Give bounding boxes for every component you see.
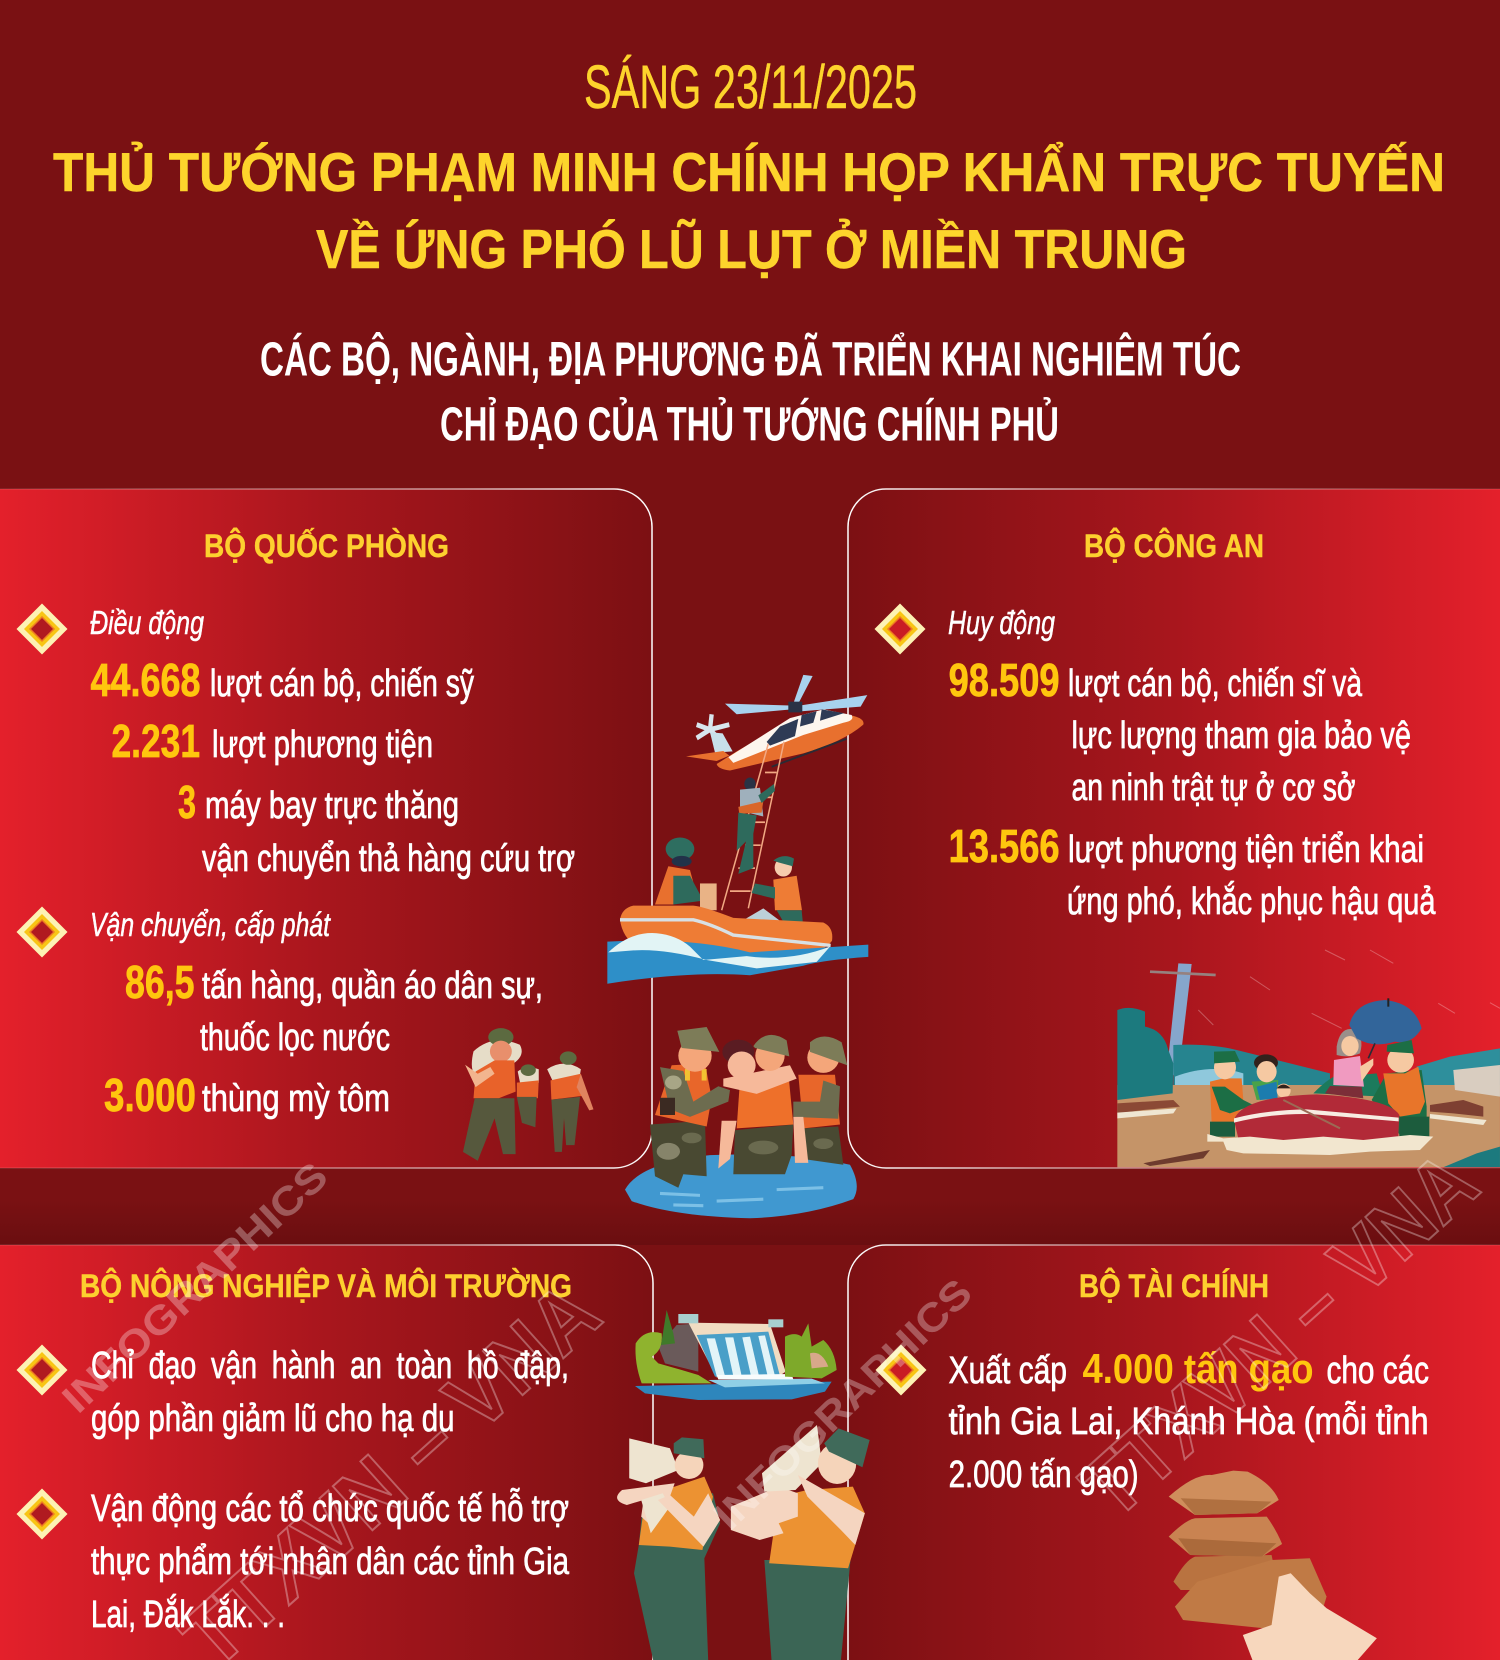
subtitle line 2: CHỈ ĐẠO CỦA THỦ TƯỚNG CHÍNH PHỦ bbox=[440, 396, 1059, 452]
text: international support: Vận động các tổ chức quốc tế hỗ trợ bbox=[91, 1487, 569, 1530]
water bbox=[607, 941, 868, 984]
label: Vận chuyển, cấp phát: Vận chuyển, cấp phát bbox=[90, 906, 331, 943]
text: dam operation bbox=[91, 1345, 569, 1440]
stat: 44.668: 44.668 bbox=[90, 654, 200, 706]
illustration: soldiers carrying sacks bbox=[463, 1028, 593, 1161]
panel: Bộ Quốc phòng bbox=[0, 489, 652, 1168]
illustration: soldier carrying sack right bbox=[731, 1425, 870, 1660]
soldier right bbox=[793, 1037, 847, 1165]
icon: diamond bullet bbox=[16, 1488, 68, 1540]
text: dam operation: Chỉ đạo vận hành an toàn hồ đập, bbox=[91, 1345, 569, 1387]
label: Điều động: Điều động bbox=[90, 604, 204, 641]
rescuer right bbox=[744, 856, 803, 927]
panel: Bộ Nông nghiệp và Môi trường bbox=[0, 1245, 653, 1660]
panel: Bộ Tài chính bbox=[848, 1245, 1500, 1660]
date line: SÁNG 23/11/2025 bbox=[584, 53, 917, 121]
stat: 44.668 bbox=[90, 654, 474, 706]
icon: diamond bullet bbox=[16, 1344, 68, 1396]
stat: 86,5 bbox=[125, 956, 543, 1059]
rope ladder bbox=[722, 742, 784, 910]
flood water bbox=[625, 1154, 857, 1218]
header bbox=[53, 53, 1445, 452]
stat: 98.509: lượt cán bộ, chiến sĩ và bbox=[1068, 663, 1363, 705]
illustration: flood rescue scene bbox=[1117, 950, 1500, 1167]
stat: 86,5: thuốc lọc nước bbox=[200, 1017, 390, 1059]
stat: 13.566: 13.566 bbox=[949, 820, 1060, 872]
stat: 13.566 bbox=[949, 820, 1436, 923]
illustration: helicopter and rescue boat bbox=[607, 675, 868, 984]
heading: BỘ TÀI CHÍNH bbox=[1079, 1268, 1269, 1304]
stat: 3 helicopters bbox=[178, 776, 575, 880]
panel: Bộ Công an bbox=[848, 489, 1500, 1168]
watermark: INFOGRAPHICS left: INFOGRAPHICS bbox=[54, 1154, 336, 1422]
text: dam operation: góp phần giảm lũ cho hạ du bbox=[91, 1398, 454, 1440]
stat: 2.231 bbox=[112, 715, 433, 767]
watermark: INFOGRAPHICS right: INFOGRAPHICS bbox=[706, 1271, 981, 1538]
text: rice allocation: Xuất cấp bbox=[949, 1350, 1067, 1392]
stat: 2.231: 2.231 bbox=[112, 715, 200, 767]
helicopter bbox=[686, 675, 867, 771]
label: Huy động: Huy động bbox=[948, 604, 1055, 641]
icon: diamond bullet bbox=[874, 604, 926, 654]
stat: 3 helicopters: 3 bbox=[178, 776, 196, 828]
stat: 3.000: thùng mỳ tôm bbox=[202, 1078, 390, 1120]
civilian and soldier centre bbox=[718, 1035, 808, 1174]
stat: 3 helicopters: máy bay trực thăng bbox=[205, 785, 459, 827]
icon: diamond bullet bbox=[16, 906, 68, 958]
stat: 98.509: 98.509 bbox=[949, 654, 1060, 706]
text: international support bbox=[91, 1487, 570, 1636]
illustration: soldier carrying sack left bbox=[617, 1437, 720, 1660]
heading: BỘ CÔNG AN bbox=[1084, 528, 1264, 564]
stat: 44.668: lượt cán bộ, chiến sỹ bbox=[210, 663, 474, 705]
heading: BỘ NÔNG NGHIỆP VÀ MÔI TRƯỜNG bbox=[80, 1268, 572, 1304]
stat: 3.000: 3.000 bbox=[104, 1069, 196, 1121]
stat: 98.509 bbox=[949, 654, 1411, 809]
icon: diamond bullet bbox=[16, 604, 68, 654]
stat: 2.231: lượt phương tiện bbox=[212, 724, 433, 766]
stat: 86,5: tấn hàng, quần áo dân sự, bbox=[202, 965, 543, 1007]
boat bbox=[620, 906, 832, 964]
text: rice allocation: tỉnh Gia Lai, Khánh Hòa (mỗi tỉnh bbox=[949, 1400, 1429, 1443]
text: international support: Lai, Đắk Lắk. . . bbox=[91, 1593, 285, 1636]
stat: 98.509: an ninh trật tự ở cơ sở bbox=[1072, 767, 1356, 809]
text: rice allocation: cho các bbox=[1326, 1350, 1429, 1392]
icon: diamond bullet bbox=[876, 1344, 926, 1396]
stat: 3 helicopters: vận chuyển thả hàng cứu trợ bbox=[202, 838, 575, 880]
main title line 2: VỀ ỨNG PHÓ LŨ LỤT Ở MIỀN TRUNG bbox=[316, 218, 1187, 280]
rescuer left bbox=[655, 838, 717, 910]
soldier left bbox=[650, 1027, 730, 1188]
text: rice allocation: 4.000 tấn gạo bbox=[1082, 1345, 1314, 1392]
text: rice allocation bbox=[949, 1345, 1429, 1496]
text: international support: thực phẩm tới nhân dân các tỉnh Gia bbox=[91, 1541, 570, 1583]
illustration: rice sacks bbox=[1169, 1471, 1377, 1660]
climber bbox=[737, 777, 775, 874]
stat: 86,5: 86,5 bbox=[125, 956, 194, 1008]
illustration: soldiers rescuing civilian bbox=[625, 1027, 857, 1218]
illustration: dam bbox=[635, 1310, 837, 1400]
heading: BỘ QUỐC PHÒNG bbox=[204, 528, 449, 564]
text: rice allocation: 2.000 tấn gạo) bbox=[949, 1454, 1139, 1496]
stat: 3.000 bbox=[104, 1069, 390, 1121]
